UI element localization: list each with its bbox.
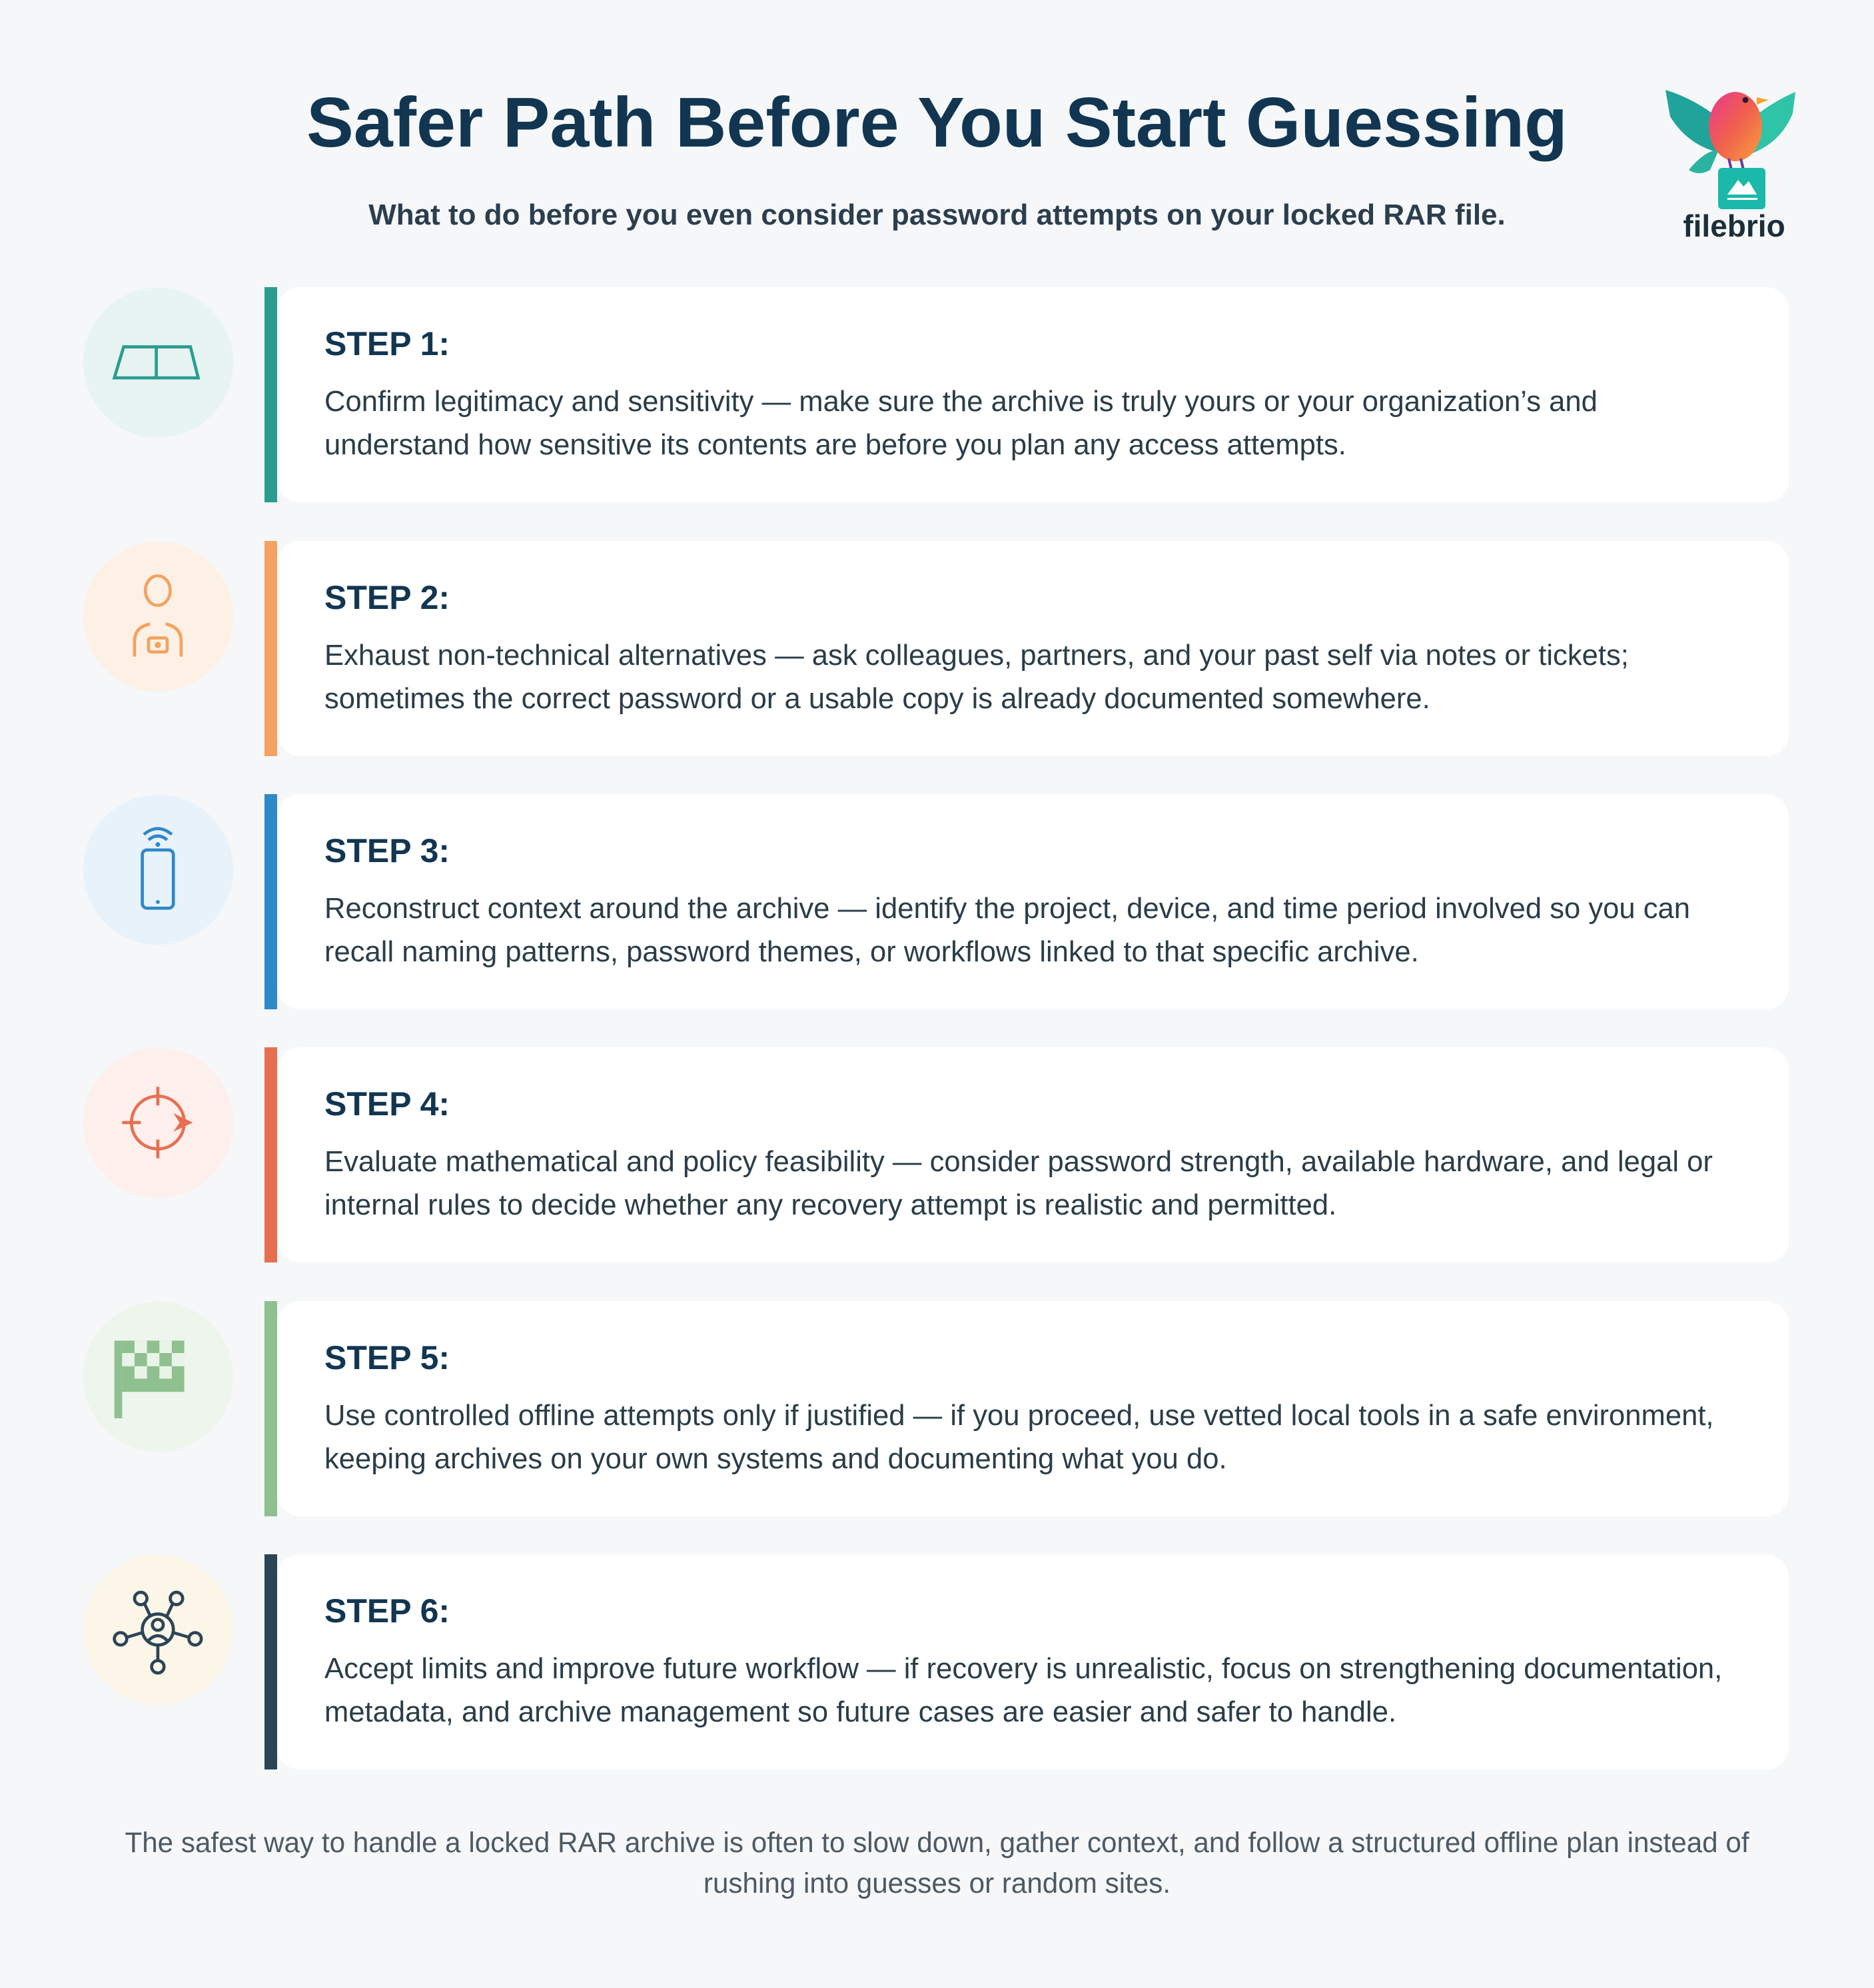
panel: step 2 (264, 541, 1789, 756)
panel: step 5: STEP 5: (324, 1339, 450, 1376)
panel: step 4: Evaluate mathematical and policy feasibility — consider password strength, available hardware, and legal or (324, 1146, 1713, 1178)
panel: step 5: Use controlled offline attempts only if justified — if you proceed, use vetted local tools in a safe environment, (324, 1400, 1714, 1432)
title: Safer Path Before You Start Guessing (306, 83, 1568, 162)
panel: step 3 (264, 794, 1789, 1009)
step 5 icon: checkered flag (83, 1302, 233, 1452)
panel: step 5 (264, 1301, 1789, 1516)
panel: step 6: STEP 6: (324, 1592, 450, 1630)
panel: step 4: internal rules to decide whether any recovery attempt is realistic and permitted. (324, 1189, 1336, 1221)
panel: step 2: Exhaust non-technical alternatives — ask colleagues, partners, and your past self via notes or tickets; (324, 640, 1629, 672)
panel: step 6 (264, 1554, 1789, 1769)
panel: step 5: keeping archives on your own systems and documenting what you do. (324, 1443, 1227, 1475)
step 1 icon: road (83, 288, 233, 438)
panel: step 2: sometimes the correct password or a usable copy is already documented somewhere. (324, 683, 1430, 715)
panel: step 4 (264, 1047, 1789, 1262)
panel: step 6: metadata, and archive management so future cases are easier and safer to handle. (324, 1696, 1396, 1728)
panel: step 4: STEP 4: (324, 1085, 450, 1123)
panel: step 1: Confirm legitimacy and sensitivity — make sure the archive is truly yours or your organization’s and (324, 386, 1598, 418)
footer note: The safest way to handle a locked RAR archive is often to slow down, gather context, and follow a structured offline plan instead of (125, 1827, 1749, 1858)
step 4 icon: target (83, 1048, 233, 1198)
panel: step 1 (264, 287, 1789, 502)
panel: step 6: Accept limits and improve future workflow — if recovery is unrealistic, focus on strengthening documentation, (324, 1653, 1722, 1685)
step 6 icon: network (83, 1555, 233, 1705)
step 3 icon: phone (83, 795, 233, 945)
panel: step 3: Reconstruct context around the archive — identify the project, device, and time period involved so you can (324, 893, 1690, 925)
panel: step 1: STEP 1: (324, 325, 450, 362)
footer note: rushing into guesses or random sites. (703, 1867, 1171, 1899)
step 2 icon: person (83, 542, 233, 692)
panel: step 3: STEP 3: (324, 832, 450, 869)
panel: step 2: STEP 2: (324, 579, 450, 616)
footer note (125, 1827, 1749, 1899)
subtitle: What to do before you even consider password attempts on your locked RAR file. (368, 199, 1506, 231)
panel: step 3: recall naming patterns, password themes, or workflows linked to that specific archive. (324, 936, 1419, 968)
panel: step 1: understand how sensitive its contents are before you plan any access attempts. (324, 429, 1346, 461)
logo: filebrio (1665, 90, 1795, 243)
logo: filebrio: filebrio (1683, 209, 1785, 243)
